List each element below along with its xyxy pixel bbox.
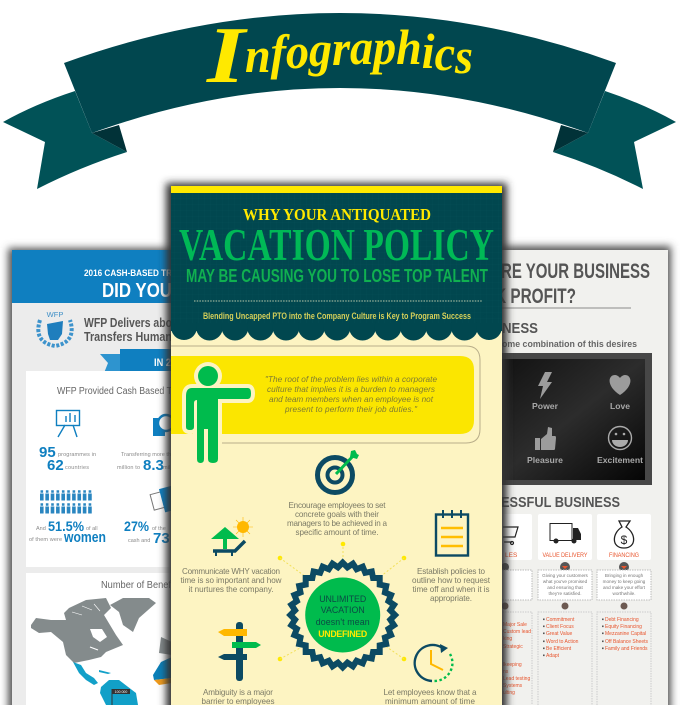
ribbon right fold (553, 125, 588, 152)
ribbon band (64, 13, 616, 133)
stat: 8.3 million: mil (163, 465, 170, 471)
icon: banknotes (149, 485, 181, 515)
map arctic gaps (72, 604, 100, 615)
left ribbon heading: IN 2 (154, 357, 171, 369)
map africa south (154, 678, 172, 685)
text: establish policies: time off and when it is (412, 585, 490, 594)
financing list: Debt Financing (605, 617, 639, 623)
icon: money bag: $ (621, 533, 628, 547)
financing list: Family and Friends (605, 646, 648, 652)
right heading: K PROFIT? (495, 285, 576, 308)
map title: Number of Benef (101, 580, 171, 591)
stat: 27% cash: 73 (153, 530, 170, 547)
icon: excitement smile (608, 426, 632, 450)
ribbon right tail (553, 91, 676, 189)
stat: 27% cash: of the (152, 526, 166, 532)
stat: 27% cash: 27% (124, 518, 149, 534)
map caribbean (99, 670, 111, 674)
sales list: Strategic (503, 644, 523, 650)
value delivery list: Commitment (546, 617, 575, 623)
sales list: lkeeping (503, 662, 522, 668)
stat: 8.3 million: million to (117, 465, 140, 471)
stat: 95 programmes: 95 (39, 444, 56, 461)
value delivery note: what you've promised (543, 579, 588, 584)
stat: 95 programmes: 62 (47, 457, 64, 474)
sales label: LES (505, 552, 518, 559)
centre panel shadow (166, 183, 507, 705)
right panel background (495, 250, 668, 705)
financing list: Off Balance Sheets (605, 639, 648, 645)
sales list: Major Sale (503, 622, 527, 628)
map hudson bay (90, 629, 107, 642)
icon: rows of people (40, 492, 93, 510)
icon: target (318, 450, 359, 492)
quote text: present to perform their job duties." (284, 405, 418, 414)
sales list: ns (503, 669, 509, 675)
header subtitle: Blending Uncapped PTO into the Company Culture is Key to Program Success (203, 311, 471, 321)
stat: 27% cash: cash and (128, 538, 150, 544)
badge text: UNLIMITED (319, 594, 366, 604)
stat: 51.5% women (29, 518, 106, 546)
section subtitle: ome combination of this desires (502, 339, 637, 349)
column: sales (495, 514, 532, 705)
value delivery note: Giving your customers (542, 573, 589, 578)
chalkboard (495, 353, 652, 485)
text: communicate why: it nurtures the company. (188, 585, 274, 594)
ribbon banner (3, 12, 676, 189)
map south america (100, 680, 138, 705)
map central america (73, 662, 98, 685)
badge text (316, 594, 370, 639)
icon: WFP logo: WFP (47, 310, 63, 319)
text: communicate why (180, 567, 282, 594)
value delivery label: VALUE DELIVERY (542, 552, 588, 559)
sales note (495, 563, 532, 610)
panel: left WFP infographic (8, 248, 181, 705)
chalkboard labels: Power (532, 401, 559, 411)
text: establish policies (412, 567, 491, 603)
value delivery list (538, 612, 592, 705)
chalkboard labels (527, 401, 643, 465)
icon: signpost (218, 622, 261, 681)
stat: 8.3 million: Transferring more th (121, 452, 171, 458)
stat: 95 programmes: programmes in (58, 452, 96, 458)
financing label: FINANCING (609, 552, 639, 559)
header dark scalloped band (171, 193, 502, 340)
quote text: culture that implies it is a burden to managers (267, 385, 435, 394)
text: set goals: specific amount of time. (296, 528, 378, 537)
text: set goals (287, 501, 387, 537)
icon: notepad (436, 510, 468, 556)
map value tag: 100 000 (115, 690, 127, 694)
map africa north (153, 657, 172, 680)
value delivery list: Great Value (546, 631, 573, 637)
stat: 51.5% women: of them were (29, 537, 62, 543)
text: set goals: concrete goals with their (295, 510, 379, 519)
chalkboard labels: Excitement (597, 455, 643, 465)
stat: 51.5% women: 51.5% (48, 518, 84, 534)
stat: 51.5% women: And (36, 526, 46, 532)
section title 2: ESSFUL BUSINESS (501, 494, 620, 511)
sales list (495, 612, 532, 705)
map europe (159, 637, 172, 655)
financing note (597, 562, 651, 610)
icon: cart (503, 527, 518, 544)
chalkboard labels: Love (610, 401, 630, 411)
right heading (495, 260, 650, 308)
text: set goals: managers to be achieved in a (287, 519, 387, 528)
map greenland (110, 598, 156, 632)
text: set goals: Encourage employees to set (288, 501, 386, 510)
stat: 27% cash (124, 518, 170, 547)
quote text (265, 375, 437, 414)
text: ambiguity: Ambiguity is a major (203, 688, 273, 697)
left intro text: WFP Delivers abo (84, 315, 172, 330)
header line two: VACATION POLICY (179, 220, 494, 270)
icon: love heart (610, 375, 630, 395)
sales list: king (503, 636, 512, 642)
icon: WFP logo (38, 310, 72, 346)
ribbon left fold (92, 125, 127, 152)
financing note: and make your effort (603, 585, 646, 590)
badge text: VACATION (321, 605, 365, 615)
header grid texture (171, 193, 502, 323)
stat: 95 programmes: countries (65, 465, 89, 471)
left intro text: Transfers Human (84, 329, 172, 344)
icon: truck (550, 524, 581, 544)
financing note: Bringing in enough (605, 573, 644, 578)
text: establish policies: appropriate. (430, 594, 472, 603)
icon: money bag (614, 521, 634, 548)
text: communicate why: time is so important and how (180, 576, 282, 585)
badge inner star (295, 567, 391, 663)
ribbon left tail (3, 91, 127, 189)
financing list: Mezzanine Capital (605, 631, 646, 637)
column: financing (597, 514, 651, 705)
sales list: Lead testing (503, 676, 530, 682)
header line three: MAY BE CAUSING YOU TO LOSE TOP TALENT (186, 266, 488, 286)
icon: beach chair and sun (211, 517, 253, 556)
quote text: and team members when an employee is not (269, 395, 434, 404)
text: ambiguity (202, 688, 274, 705)
badge: unlimited vacation (286, 558, 399, 672)
right divider (495, 308, 631, 309)
map value tag (112, 689, 130, 705)
stat: 8.3 million (117, 452, 171, 474)
left panel shadow (8, 248, 178, 705)
text: minimum time: Let employees know that a (384, 688, 477, 697)
section title: NESS (502, 320, 538, 337)
column: value delivery (538, 514, 592, 705)
value delivery list: Adapt (546, 653, 560, 659)
card: WFP provided cash (26, 371, 181, 567)
value delivery list: Be Efficient (546, 646, 572, 652)
banner title (206, 12, 473, 100)
badge outer star (286, 558, 399, 672)
centre header (171, 186, 502, 340)
dotted divider (194, 300, 482, 302)
icon: pointing person (186, 362, 251, 463)
right panel shadow (495, 246, 671, 705)
left header band (12, 250, 177, 303)
stat: 8.3 million: 8.3 (143, 457, 164, 474)
panel: right business infographic (495, 246, 671, 705)
value delivery list: Client Focus (546, 624, 574, 630)
left ribbon heading (100, 349, 175, 373)
financing note: money to keep going (603, 579, 646, 584)
centre panel background (171, 186, 502, 705)
quote block (171, 346, 480, 443)
banner title: I (206, 12, 248, 100)
icon: pleasure thumb (535, 427, 556, 450)
card title: WFP Provided Cash Based T (57, 386, 172, 397)
text: establish policies: outline how to request (412, 576, 491, 585)
left intro text (84, 315, 172, 344)
badge green circle (305, 578, 380, 652)
stat: 51.5% women: of all (86, 526, 98, 532)
card: beneficiaries map (26, 573, 176, 705)
financing list: Equity Financing (605, 624, 642, 630)
left header small title: 2016 CASH-BASED TR (84, 268, 172, 279)
map north america (31, 598, 123, 663)
map great lakes (90, 647, 98, 650)
icon: clock (415, 644, 452, 681)
connector dots and dashed lines (278, 542, 406, 661)
icon: coins (153, 415, 174, 436)
value delivery note (538, 562, 592, 610)
stat: 51.5% women: women (63, 529, 106, 546)
badge text: UNDEFINED (318, 629, 367, 639)
icon: power bolt (538, 372, 552, 399)
left panel background (12, 250, 177, 705)
panel: centre vacation policy infographic (166, 183, 507, 705)
badge text: doesn't mean (316, 617, 370, 627)
financing list (597, 612, 651, 705)
quote yellow panel (171, 356, 474, 434)
financing note: worthwhile. (613, 591, 635, 596)
top yellow stripe (171, 186, 502, 193)
quote outline (171, 346, 480, 443)
value delivery list: Word to Action (546, 639, 579, 645)
value delivery note: they're satisfied. (548, 591, 582, 596)
value delivery note: and ensuring that (547, 585, 583, 590)
header line one: WHY YOUR ANTIQUATED (243, 205, 431, 224)
quote text: "The root of the problem lies within a corporate (265, 375, 437, 384)
chalkboard labels: Pleasure (527, 455, 563, 465)
banner title: nfographics (245, 19, 473, 84)
text: minimum time (384, 688, 477, 705)
stat: 95 programmes (39, 444, 96, 474)
left header big title: DID YOU (102, 280, 172, 302)
sales list: Systems (503, 683, 523, 689)
text: establish policies: Establish policies to (417, 567, 485, 576)
text: communicate why: Communicate WHY vacation (182, 567, 280, 576)
sales list: Custom lead (503, 629, 531, 635)
icon: presentation board (56, 410, 80, 437)
sales list: ulting (503, 690, 515, 696)
